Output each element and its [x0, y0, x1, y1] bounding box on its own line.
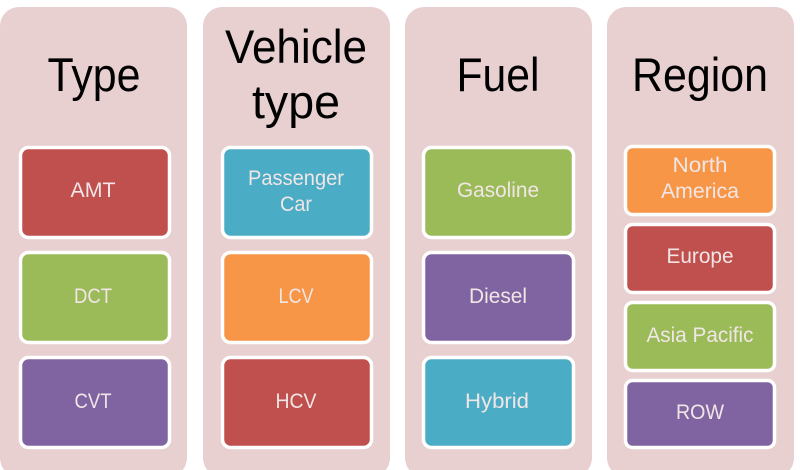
box: CVT: CVT — [74, 390, 112, 413]
panel: Type — [0, 7, 187, 470]
heading: Type: Type — [48, 48, 140, 101]
heading: Vehicle type: type — [252, 75, 340, 128]
box: Passenger Car: Car — [280, 193, 312, 216]
box: Passenger Car — [222, 148, 372, 238]
box: North America: America — [661, 180, 739, 203]
box: AMT: AMT — [70, 179, 116, 202]
box: North America: North — [672, 154, 728, 177]
box: Asia Pacific: Asia Pacific — [646, 324, 754, 347]
box: Gasoline — [424, 148, 574, 238]
box: ROW — [626, 380, 774, 448]
box: Gasoline: Gasoline — [457, 179, 539, 202]
panel: Region — [607, 7, 794, 470]
box: Hybrid — [424, 358, 574, 448]
heading: Vehicle type: Vehicle — [225, 20, 367, 73]
box: CVT — [20, 358, 170, 448]
panel: Fuel — [405, 7, 592, 470]
heading: Fuel: Fuel — [456, 48, 540, 101]
box: Asia Pacific — [626, 302, 774, 370]
box: AMT — [20, 148, 170, 238]
box: LCV — [222, 252, 372, 342]
box: Passenger Car: Passenger — [248, 167, 344, 190]
box: ROW: ROW — [676, 401, 724, 424]
box: Europe: Europe — [666, 245, 734, 268]
box: DCT — [20, 252, 170, 342]
box: DCT: DCT — [74, 285, 112, 308]
box: Diesel — [424, 252, 574, 342]
box: Hybrid: Hybrid — [465, 390, 529, 413]
box: Diesel: Diesel — [469, 285, 527, 308]
box: North America — [626, 146, 774, 214]
box: HCV: HCV — [276, 390, 316, 413]
panel: Vehicle type — [203, 7, 390, 470]
box: HCV — [222, 358, 372, 448]
box: LCV: LCV — [278, 285, 314, 308]
box: Europe — [626, 224, 774, 292]
heading: Region: Region — [632, 48, 768, 101]
